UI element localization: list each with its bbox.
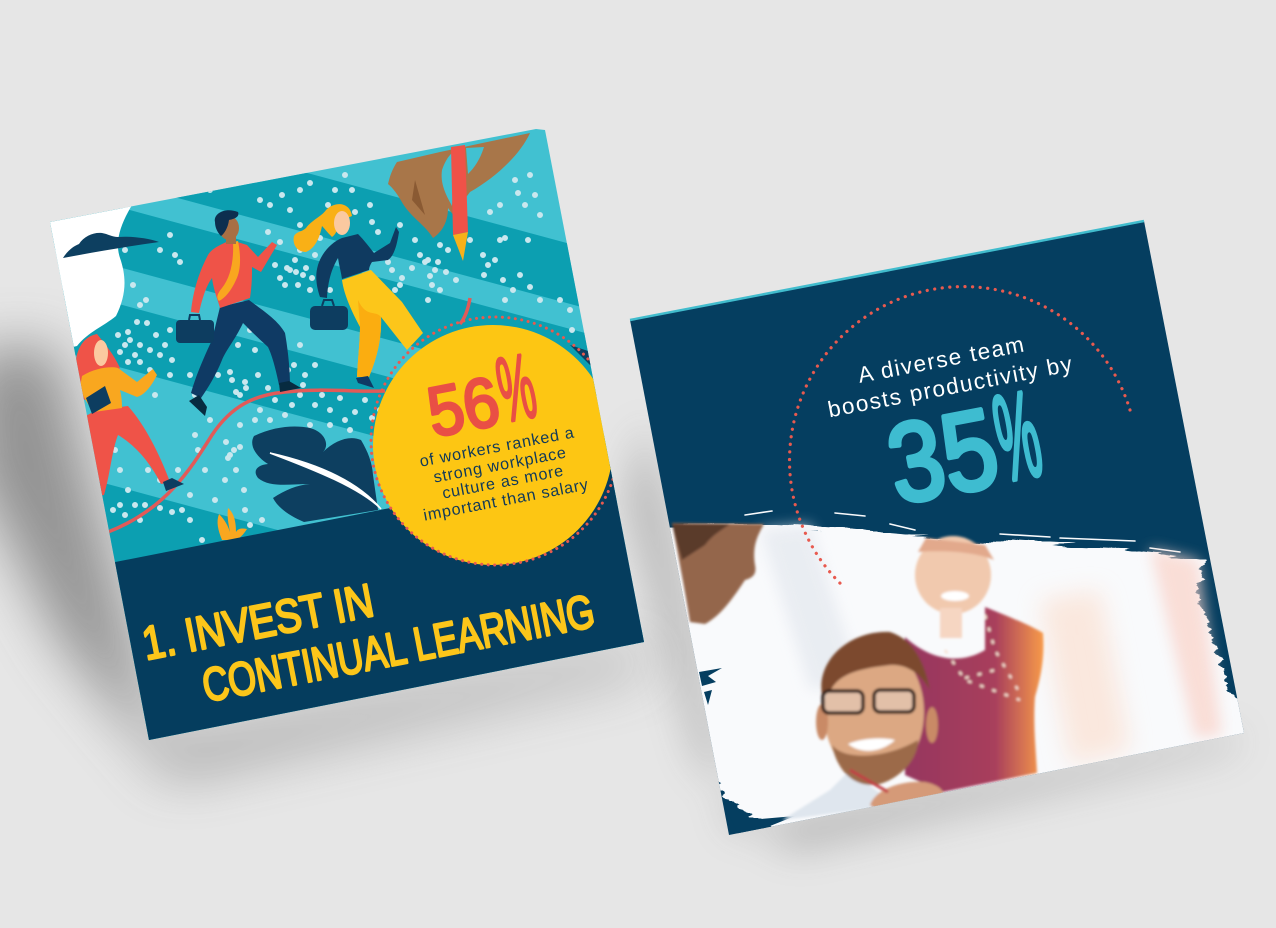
teal top edge xyxy=(630,221,1144,320)
white wave corner xyxy=(50,206,132,347)
card shadows xyxy=(0,345,1240,850)
statistic 35%: 35 xyxy=(878,385,1008,528)
navy footer band xyxy=(115,464,644,740)
icon: monstera leaf xyxy=(252,427,381,522)
woman's dress xyxy=(905,607,1043,792)
panel: right card xyxy=(630,221,1262,860)
left man profile xyxy=(672,523,764,624)
heading: invest in continual learning: CONTINUAL LEARNING xyxy=(198,584,599,712)
icon: cloud xyxy=(63,233,159,258)
statistic description: important than salary xyxy=(422,475,590,525)
icon: yellow sprout xyxy=(218,508,247,540)
man's shirt xyxy=(782,772,879,821)
dotted arc xyxy=(790,287,1130,588)
photo backdrop with brushed edges xyxy=(670,523,1244,827)
panel: left card xyxy=(50,129,644,740)
man's head xyxy=(823,664,926,758)
statistic description: of workers ranked a xyxy=(418,424,576,471)
necklace xyxy=(945,615,1020,700)
figure: hand holding pen xyxy=(388,133,530,261)
statistic caption: boosts productivity by xyxy=(826,351,1075,422)
navy card base xyxy=(630,221,1244,835)
statistic 56%: 56 xyxy=(421,362,506,452)
heading: invest in continual learning xyxy=(138,573,599,712)
figure: man with briefcase xyxy=(176,210,301,416)
callout: yellow circle with 56% statistic xyxy=(371,317,619,565)
red winding path xyxy=(108,390,385,532)
man's glasses xyxy=(823,690,914,713)
statistic description: culture as more xyxy=(441,462,565,503)
brush streaks along photo top xyxy=(745,511,1180,552)
man's hand with pen xyxy=(870,782,943,812)
statistic description: strong workplace xyxy=(432,444,568,487)
woman's face xyxy=(915,536,991,614)
photo subjects xyxy=(672,523,1043,820)
confetti dots xyxy=(113,175,572,540)
photo: team of colleagues xyxy=(670,510,1244,834)
figure: woman with tablet xyxy=(76,334,184,500)
statistic 56% xyxy=(428,353,537,436)
statistic description xyxy=(420,428,588,520)
statistic 35%: % xyxy=(984,366,1051,507)
small navy leaf behind circle xyxy=(570,345,591,366)
statistic 56%: % xyxy=(489,335,544,442)
heading: invest in continual learning: 1. INVEST IN xyxy=(138,573,378,670)
man's hair xyxy=(821,632,930,695)
figure: woman with ponytail xyxy=(294,204,423,388)
left edge navy streaks xyxy=(699,668,795,838)
man's beard xyxy=(832,740,918,785)
statistic caption: A diverse team xyxy=(856,331,1027,388)
illustration background xyxy=(50,129,644,740)
pink light strip xyxy=(1150,548,1222,738)
